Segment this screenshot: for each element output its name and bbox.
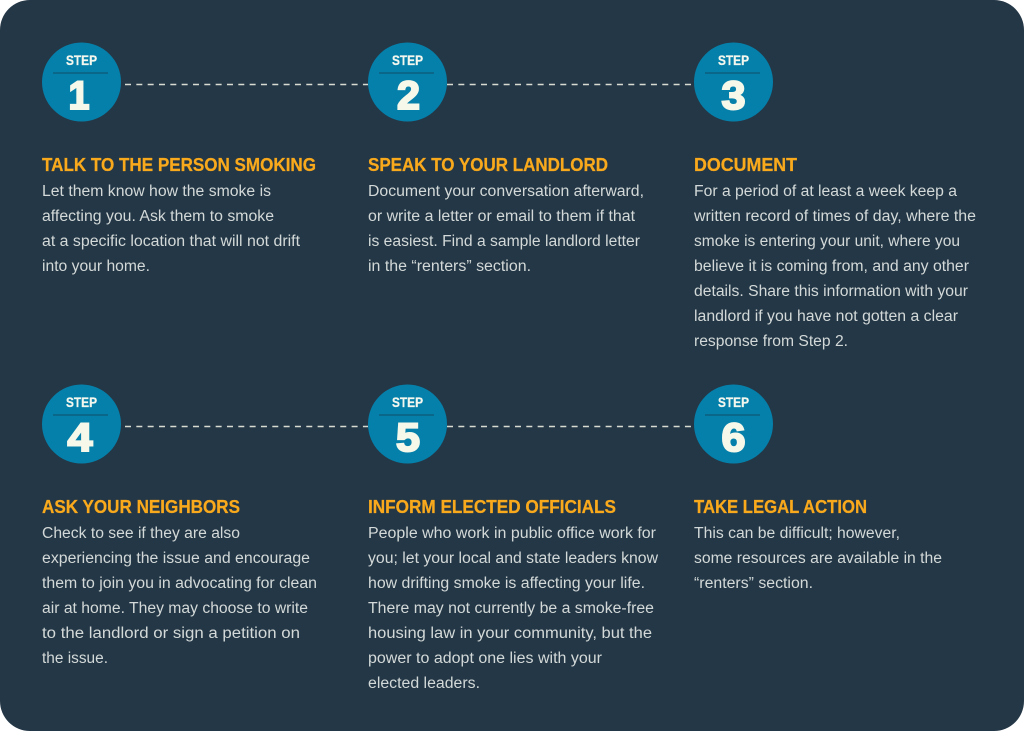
badge: step 5: 5 [396,416,420,460]
text: step 4: them to join you in advocating for clean [42,575,317,592]
heading: step 5: INFORM ELECTED OFFICIALS [368,496,616,517]
text: step 5 [368,525,659,692]
text: step 6: some resources are available in the [694,550,942,567]
text: step 4 [42,525,317,667]
badge: step 6: STEP [718,395,749,410]
text: step 6 [694,525,942,592]
heading: step 2: SPEAK TO YOUR LANDLORD [368,154,608,175]
badge: step 2: STEP [392,53,423,68]
badge: step 3: STEP [718,53,749,68]
text: step 5: how drifting smoke is affecting your life. [368,575,645,592]
badge: step 4 [42,384,121,464]
text: step 2: is easiest. Find a sample landlord letter [368,233,640,250]
text: step 5: you; let your local and state leaders know [368,550,659,567]
text: step 6: “renters” section. [694,575,813,592]
badge: step 1: STEP [66,53,97,68]
text: step 3: response from Step 2. [694,333,848,350]
connector: step 4 to 5 [125,426,368,428]
badge: step 4: 4 [68,416,93,460]
heading: step 3: DOCUMENT [694,154,798,175]
badge: step 4: STEP [66,395,97,410]
text: step 6: This can be difficult; however, [694,525,900,542]
text: step 2: in the “renters” section. [368,258,531,275]
text: step 3: For a period of at least a week keep a [694,183,957,200]
text: step 4: to the landlord or sign a petition on [42,625,300,642]
text: step 1: affecting you. Ask them to smoke [42,208,274,225]
badge: step 6: 6 [722,416,746,460]
text: step 5: There may not currently be a smoke-free [368,600,654,617]
text: step 1: into your home. [42,258,150,275]
connector: step 1 to 2 [125,84,368,86]
text: step 4: Check to see if they are also [42,525,240,542]
heading: step 6: TAKE LEGAL ACTION [694,496,867,517]
text: step 2: or write a letter or email to them if that [368,208,636,225]
heading: step 1: TALK TO THE PERSON SMOKING [42,154,316,175]
text: step 3 [693,183,976,350]
text: step 3: written record of times of day, where the [693,208,976,225]
connector: step 5 to 6 [447,426,694,428]
badge: step 1 [42,42,121,122]
text: step 2 [368,183,644,275]
badge: step 5: STEP [392,395,423,410]
heading: step 4: ASK YOUR NEIGHBORS [42,496,240,517]
badge: step 6 [694,384,773,464]
text: step 3: details. Share this information with your [694,283,968,300]
badge: step 2 [368,42,447,122]
text: step 5: housing law in your community, but the [368,625,652,642]
badge: step 3: 3 [722,74,746,118]
text: step 1: at a specific location that will not drift [42,233,301,250]
badge: step 2: 2 [397,74,420,118]
text: step 3: believe it is coming from, and any other [694,258,969,275]
text: step 4: air at home. They may choose to write [42,600,308,617]
text: step 4: the issue. [42,650,108,667]
text: step 4: experiencing the issue and encourage [42,550,310,567]
badge: step 3 [694,42,773,122]
text: step 1: Let them know how the smoke is [42,183,271,200]
text: step 3: landlord if you have not gotten a clear [694,308,958,325]
connector: step 2 to 3 [447,84,694,86]
text: step 5: People who work in public office work for [368,525,656,542]
text: step 5: power to adopt one lies with your [368,650,602,667]
text: step 2: Document your conversation afterward, [368,183,644,200]
text: step 1 [42,183,301,275]
text: step 5: elected leaders. [368,675,480,692]
text: step 3: smoke is entering your unit, where you [694,233,960,250]
badge: step 1: 1 [68,74,90,118]
badge: step 5 [368,384,447,464]
